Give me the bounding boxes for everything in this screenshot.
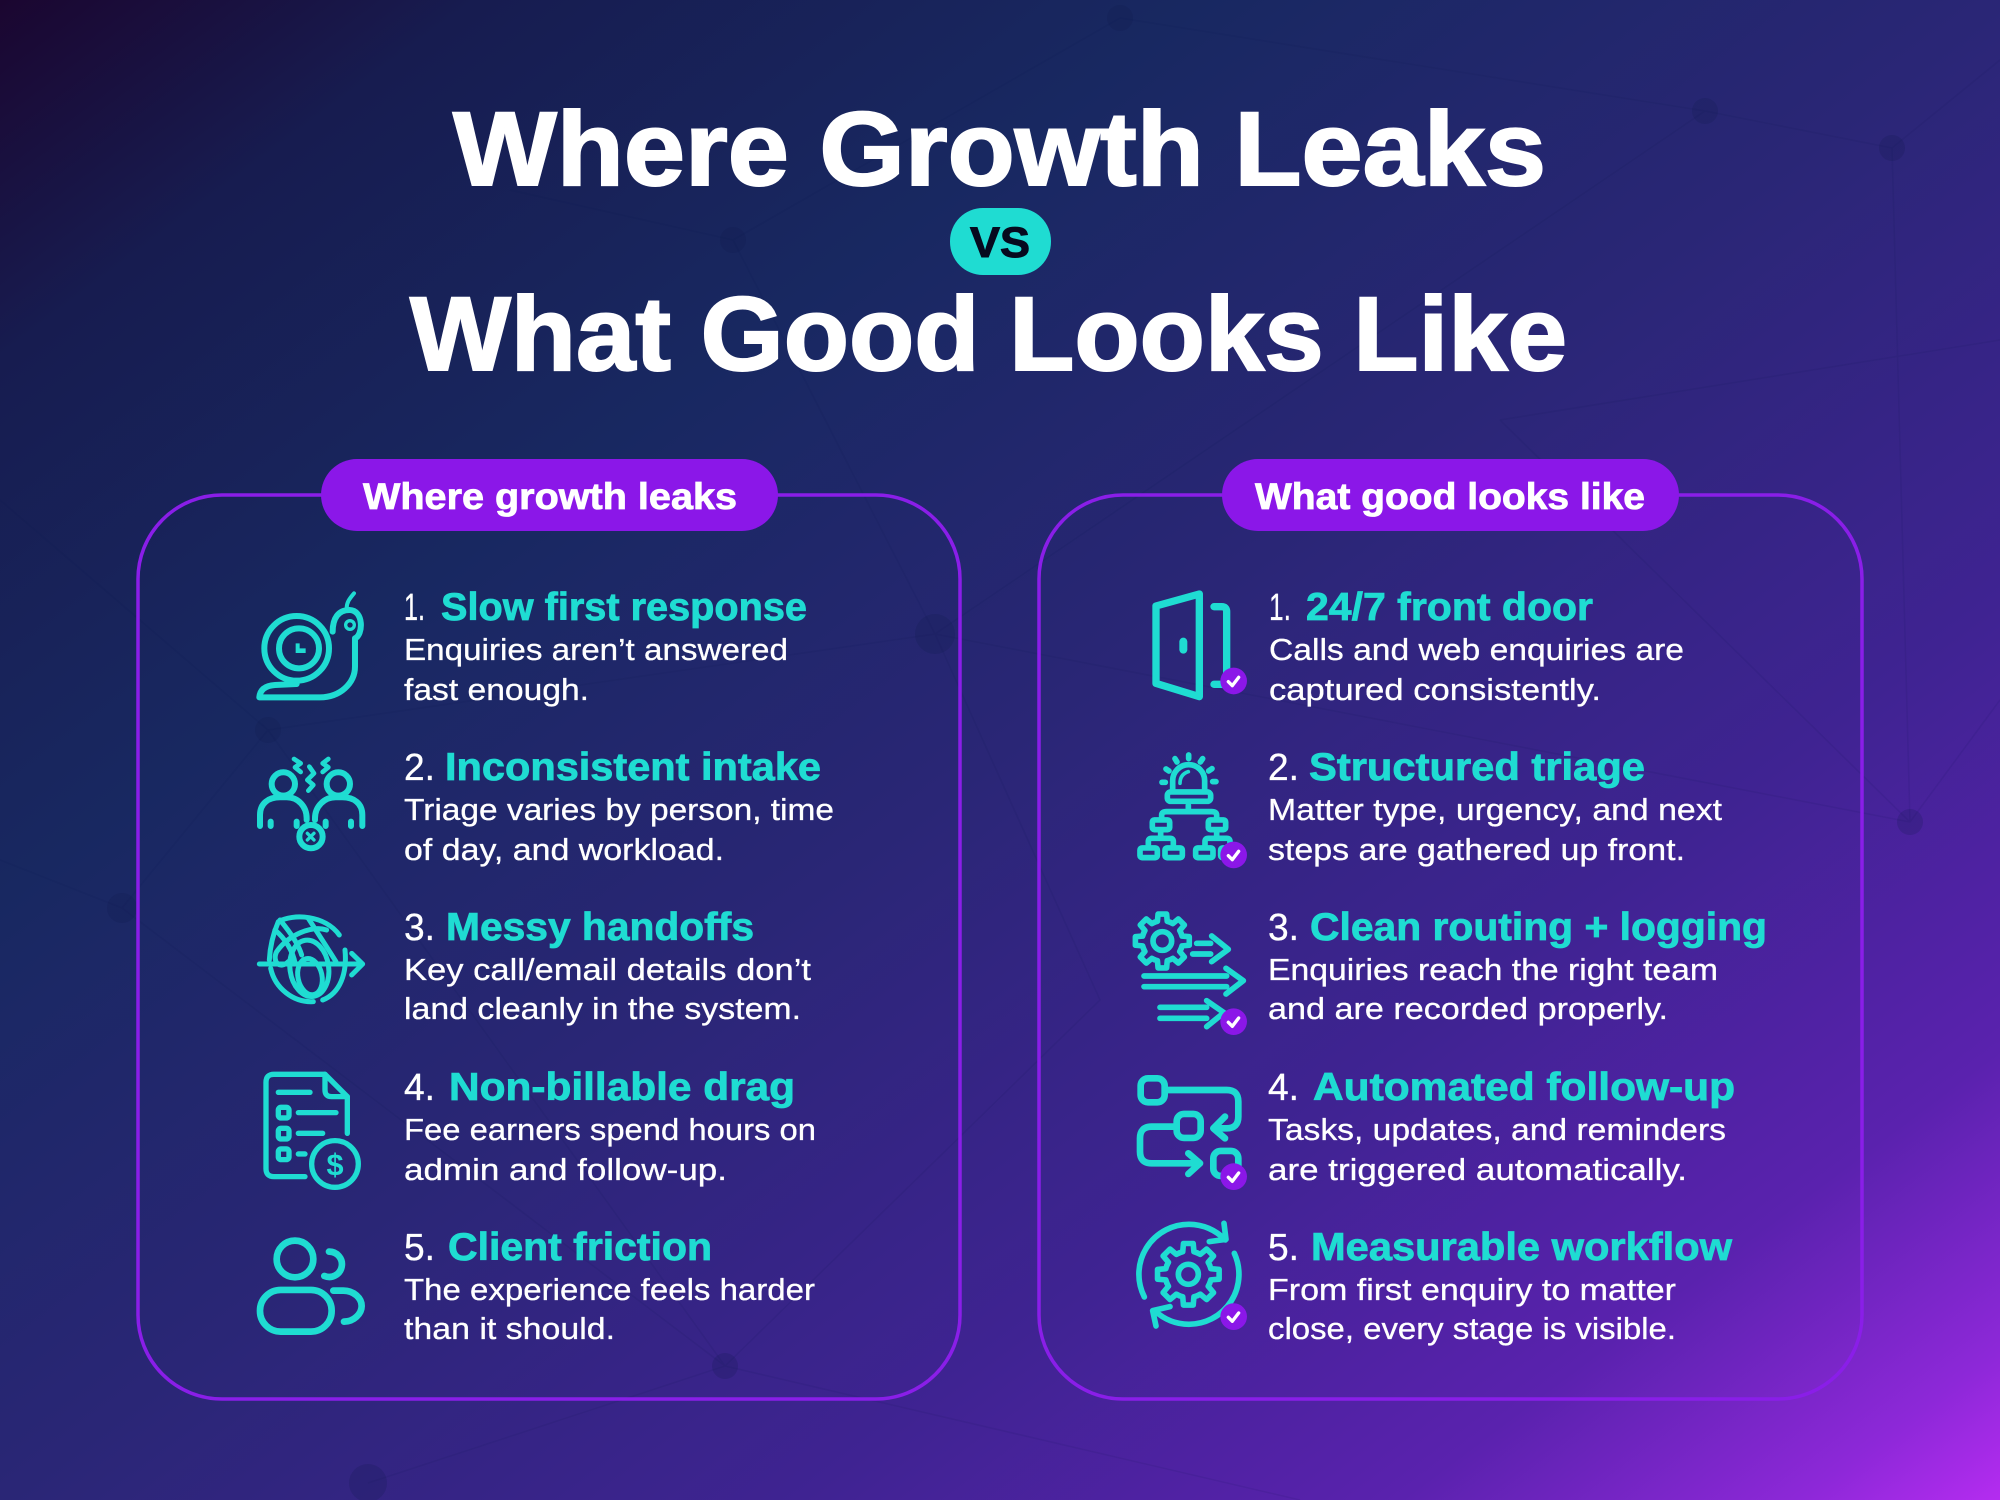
panel heading left: Where growth leaks [363,476,737,517]
vs badge: VS [970,219,1030,267]
item: client friction: 5. [404,1227,435,1269]
icon: workflow with check [1140,1078,1247,1190]
panel outline right [1039,495,1862,1399]
title line 2: What Good Looks Like [410,276,1567,393]
icon: door with check [1156,594,1247,697]
item: measurable workflow: close, every stage is visible. [1268,1311,1676,1346]
item: structured triage [1140,746,1722,868]
item: client friction: The experience feels harder [404,1272,815,1307]
item: inconsistent intake: of day, and workload. [404,832,724,867]
title line 1: Where Growth Leaks [453,91,1546,208]
item: 24/7 front door: captured consistently. [1269,672,1601,707]
item: inconsistent intake: Triage varies by person, time [404,792,834,827]
panel outline left [138,495,960,1399]
item: slow first response: fast enough. [404,672,589,707]
title [410,91,1567,393]
item: 24/7 front door: Calls and web enquiries are [1269,632,1684,667]
vs badge [950,208,1051,275]
item: slow first response: Enquiries aren’t answered [404,632,788,667]
item: clean routing + logging: and are recorded properly. [1268,991,1668,1026]
item: inconsistent intake: Inconsistent intake [445,746,821,789]
item: messy handoffs [259,906,811,1026]
item: messy handoffs: 3. [404,907,435,949]
item: inconsistent intake [260,746,834,867]
item: automated follow-up: Tasks, updates, and reminders [1268,1112,1726,1147]
item: structured triage: 2. [1268,747,1299,789]
panel: what good looks like [1039,459,1862,1399]
item: measurable workflow [1139,1223,1733,1346]
item: slow first response [259,586,807,707]
item: client friction [260,1226,815,1346]
item: clean routing + logging: 3. [1268,907,1299,949]
item: messy handoffs: Messy handoffs [446,906,754,949]
panel heading right: What good looks like [1255,476,1645,517]
icon: gear cycle with check [1139,1223,1247,1330]
item: non-billable drag [266,1066,816,1187]
item: 24/7 front door: 24/7 front door [1306,586,1593,629]
item: automated follow-up: 4. [1268,1067,1299,1109]
item: non-billable drag: Fee earners spend hours on [404,1112,816,1147]
item: clean routing + logging: Clean routing + logging [1310,906,1767,949]
item: client friction: than it should. [404,1311,615,1346]
item: 24/7 front door: 1. [1269,587,1291,629]
item: measurable workflow: Measurable workflow [1311,1226,1733,1269]
item: automated follow-up [1140,1066,1735,1190]
item: non-billable drag: 4. [404,1067,435,1109]
item: slow first response: 1. [404,587,425,629]
item: clean routing + logging [1135,906,1767,1035]
item: measurable workflow: 5. [1268,1227,1299,1269]
panel heading right [1222,459,1679,531]
item: structured triage: Matter type, urgency, and next [1268,792,1722,827]
item: slow first response: Slow first response [441,586,807,629]
item: client friction: Client friction [448,1226,712,1269]
item: 24/7 front door [1156,586,1684,707]
icon: invoice with coin: $ [326,1148,344,1182]
icon: invoice with coin [266,1074,358,1187]
panel heading left [321,459,778,531]
item: structured triage: steps are gathered up front. [1268,832,1685,867]
item: automated follow-up: are triggered automatically. [1268,1152,1687,1187]
icon: users [260,1241,362,1332]
icon: snail [259,593,361,697]
item: messy handoffs: Key call/email details don’t [404,952,811,987]
icon: clashing people [260,759,362,848]
item: non-billable drag: admin and follow-up. [404,1152,727,1187]
icon: gear and routing arrows [1135,914,1247,1035]
item: measurable workflow: From first enquiry to matter [1268,1272,1676,1307]
item: non-billable drag: Non-billable drag [449,1066,795,1109]
item: messy handoffs: land cleanly in the system. [404,991,801,1026]
item: inconsistent intake: 2. [404,747,435,789]
item: automated follow-up: Automated follow-up [1313,1066,1735,1109]
item: structured triage: Structured triage [1309,746,1645,789]
icon: siren over org tree [1140,755,1247,868]
item: clean routing + logging: Enquiries reach the right team [1268,952,1718,987]
icon: tangled arrow [259,917,363,1002]
panel: where growth leaks [138,459,960,1399]
